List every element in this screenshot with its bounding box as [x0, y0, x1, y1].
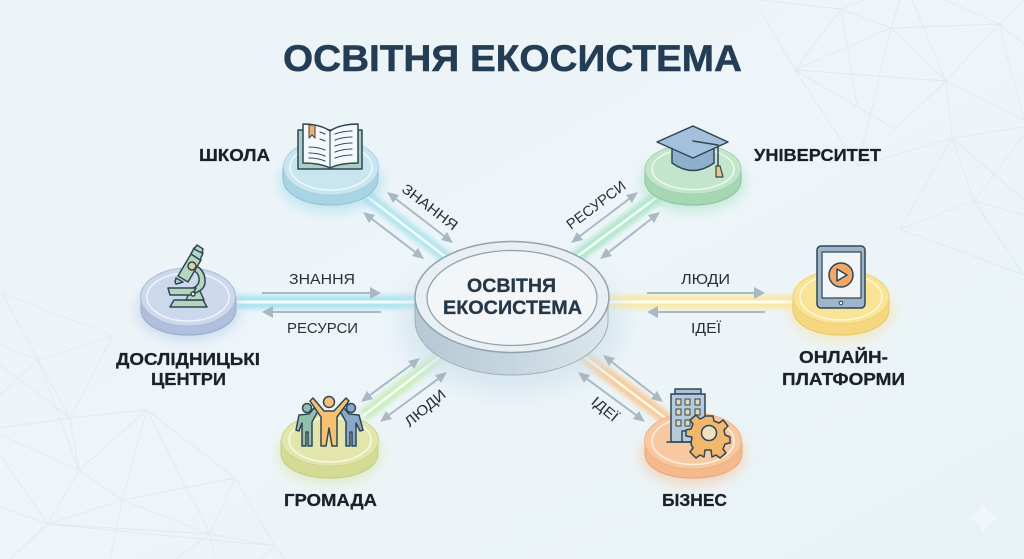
flow label: люди diagonal: ЛЮДИ — [402, 387, 450, 431]
icon: open book — [298, 124, 362, 169]
central label: ЕКОСИСТЕМА — [443, 297, 582, 319]
connection beams — [236, 195, 793, 420]
node: university — [641, 126, 745, 212]
node: community — [278, 396, 382, 484]
central label: ОСВІТНЯ — [467, 275, 556, 297]
icon: graduation cap — [657, 126, 728, 177]
beam: research centres — [236, 295, 425, 309]
beam: university — [575, 195, 660, 258]
node: online platforms — [789, 246, 893, 341]
flow label: ресурси horizontal: РЕСУРСИ — [287, 321, 358, 337]
label: business: БІЗНЕС — [662, 490, 727, 510]
central disc — [400, 242, 624, 393]
background network pattern bottom left — [0, 293, 285, 559]
arrows: research centres — [262, 287, 381, 318]
flow label: знання diagonal: ЗНАННЯ — [398, 181, 460, 234]
arrows: business — [578, 355, 663, 422]
arrows: online platforms — [647, 287, 765, 318]
label: online platforms: ПЛАТФОРМИ — [782, 369, 905, 389]
beam: business — [570, 346, 668, 420]
label: research centres: ЦЕНТРИ — [151, 369, 226, 389]
flow label: знання horizontal: ЗНАННЯ — [289, 272, 355, 288]
watermark star — [967, 500, 1000, 536]
arrows: community — [361, 358, 447, 422]
node: school — [279, 124, 383, 213]
icon: microscope — [168, 245, 207, 307]
beam: online platforms — [600, 295, 793, 309]
node: research centres — [136, 245, 240, 341]
node: business — [641, 389, 745, 485]
beam: community — [363, 345, 455, 416]
label: school: ШКОЛА — [199, 145, 270, 165]
label: research centres: ДОСЛІДНИЦЬКІ — [116, 349, 260, 369]
beam: school — [365, 195, 447, 258]
background network pattern top right — [760, 0, 1024, 275]
flow label: ідеї diagonal: ІДЕЇ — [588, 393, 622, 426]
label: community: ГРОМАДА — [284, 490, 377, 510]
arrows: university — [571, 192, 660, 259]
title: ОСВІТНЯ ЕКОСИСТЕМА — [283, 38, 742, 79]
icon: three people — [296, 396, 363, 446]
label: university: УНІВЕРСИТЕТ — [754, 145, 881, 165]
flow label: ідеї horizontal: ІДЕЇ — [691, 320, 721, 337]
label: online platforms: ОНЛАЙН- — [799, 346, 888, 367]
flow label: ресурси diagonal: РЕСУРСИ — [564, 178, 629, 233]
arrows: school — [363, 192, 453, 259]
icon: building and gear — [667, 389, 730, 458]
icon: tablet — [817, 246, 865, 308]
flow label: люди horizontal: ЛЮДИ — [681, 272, 730, 288]
